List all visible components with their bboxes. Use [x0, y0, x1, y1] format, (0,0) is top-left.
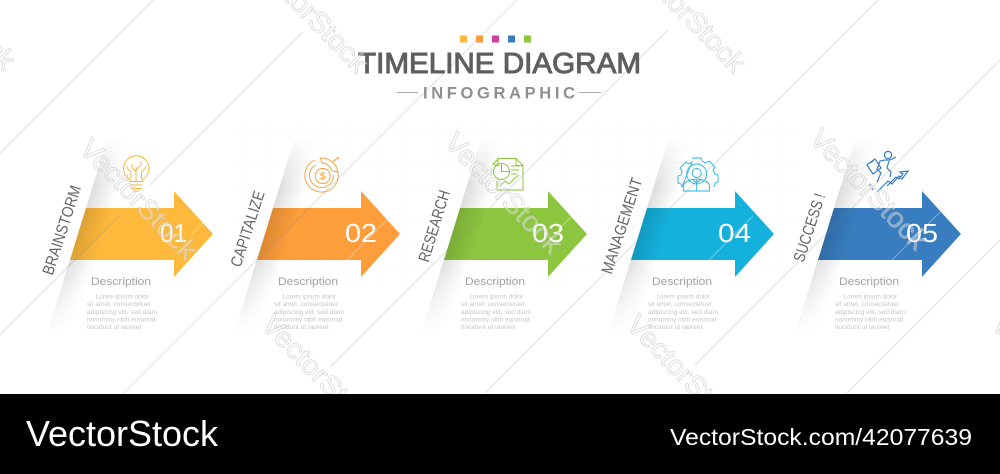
icon: light bulb — [124, 156, 149, 191]
number 01: 01 — [160, 218, 187, 248]
description 5: adipiscing elit, sed diam — [835, 309, 905, 316]
arrow 2 — [257, 191, 400, 277]
icon: report — [493, 158, 523, 190]
description 2: Lorem ipsum dolor — [282, 294, 337, 300]
icon: dollar target — [305, 157, 339, 192]
arrow 4 — [631, 191, 774, 277]
description 5 — [835, 276, 905, 331]
description 5: sit amet, consectetuer — [835, 301, 900, 308]
watermark lines on arrows — [192, 212, 940, 261]
description 5: Description — [839, 276, 899, 288]
description 2: sit amet, consectetuer — [274, 301, 339, 308]
icon: running businessman — [867, 151, 908, 192]
arrow 3 — [444, 191, 587, 277]
label BRAINSTORM: BRAINSTORM — [40, 184, 85, 277]
description 4: adipiscing elit, sed diam — [648, 309, 718, 316]
description 3: nonummy nibh euismod — [461, 316, 530, 324]
description 2: adipiscing elit, sed diam — [274, 309, 344, 316]
label CAPITALIZE: CAPITALIZE — [228, 189, 269, 269]
label SUCCESS !: SUCCESS ! — [791, 191, 829, 264]
step 3: research — [416, 140, 587, 335]
footer brand: VectorStock — [26, 413, 219, 454]
step 2: capitalize — [228, 140, 400, 335]
label MANAGEMENT: MANAGEMENT — [599, 176, 646, 276]
arrow 1 — [70, 191, 213, 277]
description 4: nonummy nibh euismod — [648, 316, 717, 324]
description 1 — [87, 276, 157, 331]
description 3: adipiscing elit, sed diam — [461, 309, 531, 316]
step 5: success — [791, 140, 961, 335]
number 03: 03 — [532, 218, 564, 248]
description 3 — [461, 276, 531, 331]
watermark text: VectorStock — [439, 127, 569, 260]
description 1: Lorem ipsum dolor — [96, 294, 150, 300]
description 3: tincidunt ut laoreet — [461, 324, 516, 331]
dollar sign: $ — [320, 172, 326, 182]
watermark text: VectorStock — [804, 123, 934, 256]
watermark text: VectorStock — [621, 309, 751, 442]
description 1: adipiscing elit, sed diam — [87, 309, 157, 316]
subtitle: INFOGRAPHIC — [423, 84, 575, 102]
description 4: Description — [652, 276, 712, 288]
description 2 — [274, 276, 344, 331]
number 02: 02 — [345, 218, 377, 248]
description 5: tincidunt ut laoreet — [835, 324, 890, 331]
title: TIMELINE DIAGRAM — [358, 48, 641, 80]
page-fold shadow 5 — [802, 148, 863, 314]
page-fold shadow 3 — [428, 148, 489, 314]
description 3: Description — [465, 276, 525, 288]
description 2: nonummy nibh euismod — [274, 316, 343, 324]
footer bar — [0, 394, 1000, 474]
step 4: management — [599, 140, 774, 335]
watermark text: VectorStock — [74, 133, 204, 266]
description 3: sit amet, consectetuer — [461, 301, 526, 308]
page-fold shadow 2 — [240, 148, 302, 314]
description 1: sit amet, consectetuer — [87, 301, 152, 308]
watermark text: VectorStock — [256, 309, 386, 442]
description 2: tincidunt ut laoreet — [274, 324, 329, 331]
description 1: Description — [91, 276, 151, 288]
step 1: brainstorm — [40, 140, 213, 335]
description 1: nonummy nibh euismod — [87, 316, 156, 324]
number 04: 04 — [718, 218, 751, 248]
description 5: Lorem ipsum dolor — [844, 294, 898, 300]
description 5: nonummy nibh euismod — [835, 316, 904, 324]
description 4: Lorem ipsum dolor — [656, 294, 711, 300]
title colour squares — [460, 36, 531, 42]
label RESEARCH: RESEARCH — [416, 188, 454, 264]
description 4: tincidunt ut laoreet — [648, 324, 703, 331]
description 4: sit amet, consectetuer — [648, 301, 713, 308]
arrow 5 — [818, 191, 961, 277]
description 4 — [648, 276, 718, 331]
page-fold shadow 1 — [54, 148, 115, 314]
footer url: VectorStock.com/42077639 — [670, 424, 972, 450]
icon: gear person — [678, 158, 718, 191]
page-fold shadow 4 — [614, 148, 676, 314]
description 2: Description — [278, 276, 338, 288]
description 1: tincidunt ut laoreet — [87, 324, 142, 331]
number 05: 05 — [906, 218, 938, 248]
description 3: Lorem ipsum dolor — [470, 294, 524, 300]
